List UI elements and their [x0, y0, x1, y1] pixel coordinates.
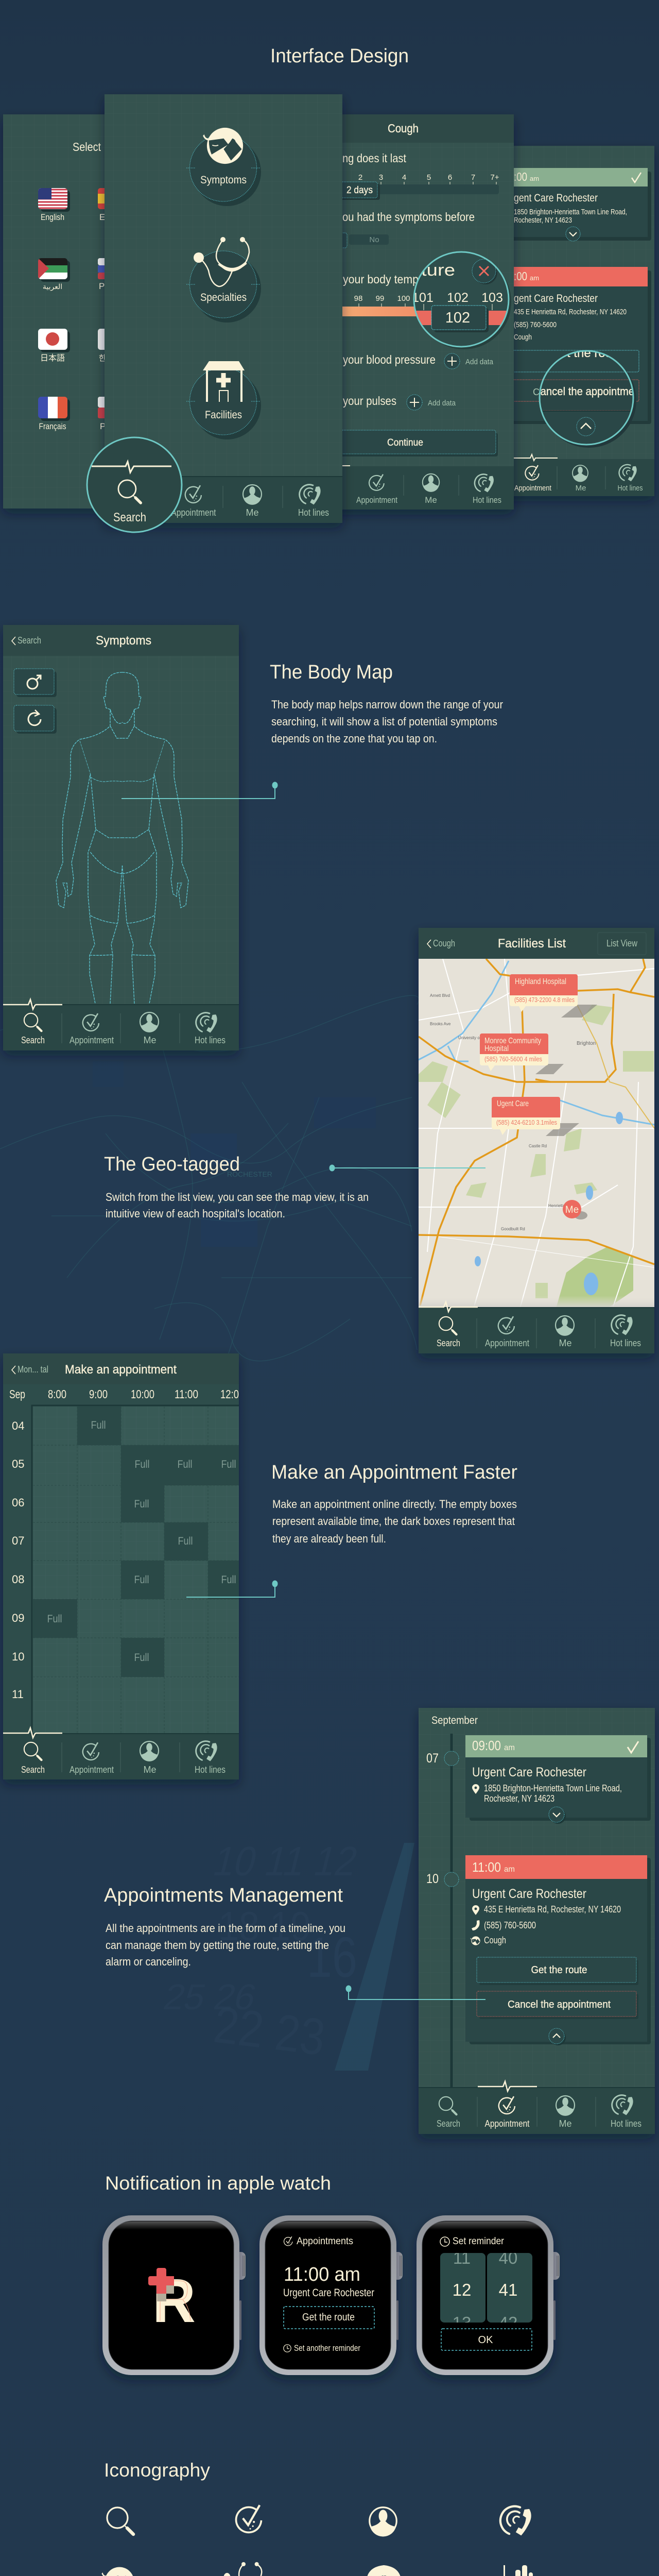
time picker: 41 [499, 2280, 517, 2299]
card: 11:00 appointment: Cancel the appointment [508, 1999, 611, 2010]
nav bar: appointment grid: Hot lines [195, 1765, 226, 1775]
nav bar: body map: Hot lines [195, 1035, 226, 1045]
background: faint calendar numerals: 25 26 [160, 1977, 260, 2018]
card: 11:00 appointment: 435 E Henrietta Rd, Rochester, NY 14620 [484, 1904, 621, 1914]
zoom circle: search tab [87, 437, 182, 532]
map pin: me [563, 1200, 587, 1219]
date column: 07 [12, 1534, 24, 1547]
card: 11:00 appointment: Get the route [531, 1964, 587, 1976]
text: body map description: The body map helps narrow down the range of your [271, 698, 503, 711]
schedule grid: Full [134, 1574, 149, 1586]
panel: facilities map screen [419, 928, 654, 1353]
question: duration: 2 [358, 173, 362, 182]
nav bar: search home screen: Hot lines [298, 507, 329, 518]
apple watch: appointment notification: 11:00 am [284, 2264, 360, 2285]
map pin: Monroe Community Hospital: Hospital [484, 1044, 509, 1053]
nav bar: timeline: Appointment [485, 2119, 529, 2129]
panel: appointments screen (back) [514, 146, 658, 505]
header: make an appointment: Make an appointment [65, 1363, 177, 1377]
text: geo-tagged description: Switch from the list view, you can see the map view, it is an [106, 1191, 369, 1204]
background: faint Rochester street map [0, 995, 419, 1361]
text: appointments management description: alarm or canceling. [106, 1955, 191, 1968]
map: Brighton [577, 1041, 596, 1046]
text: appointment description: they are already been full. [272, 1532, 386, 1545]
button: gender [14, 669, 57, 697]
background: faint calendar numerals: 10 11 12 [209, 1838, 362, 1885]
question: duration [330, 151, 499, 200]
card: 11:00 appointment: Urgent Care Rochester [472, 1887, 586, 1901]
map: Arnett Blvd [430, 993, 450, 998]
logo: R with red cross: R [152, 2265, 196, 2335]
nav bar: body map [3, 999, 239, 1050]
date column: 09 [12, 1612, 24, 1624]
card: 11:00 appointment: 11:00 [472, 1859, 501, 1875]
heading: make an appointment faster: Make an Appointment Faster [271, 1462, 517, 1483]
time row: 10:00 [131, 1387, 154, 1401]
question: pulses: your pulses [343, 394, 396, 408]
schedule grid: Full [221, 1459, 236, 1470]
date column: 06 [12, 1496, 24, 1509]
card: 11:00 appointment: (585) 760-5600 [484, 1920, 536, 1930]
time row: 8:00 [48, 1387, 66, 1401]
menu item: facilities [186, 361, 261, 439]
label: Japanese: 日本語 [40, 353, 65, 363]
icon: search [107, 2507, 133, 2534]
apple watch: set reminder: OK [478, 2334, 493, 2346]
apple watch: appointment notification [259, 2215, 403, 2375]
nav bar: appointments back screen: Hot lines [618, 484, 643, 493]
text: appointment description [272, 1498, 517, 1545]
question: blood pressure: Add data [465, 358, 494, 366]
text: appointments management description [106, 1922, 345, 1968]
question: body temperature: 98 [354, 294, 362, 303]
timeline axis [426, 1734, 459, 2088]
panel: appointments timeline screen [419, 1708, 655, 2134]
label: September: September [431, 1715, 478, 1726]
zoom circle: cancel the appointment [539, 350, 636, 448]
background: faint calendar numerals [160, 1838, 414, 2071]
date column: 05 [12, 1458, 24, 1470]
card: 9am appointment: 1850 Brighton-Henrietta Town Line Road, [514, 208, 627, 216]
question: duration: 4 [402, 173, 406, 182]
heading: iconography: Iconography [104, 2460, 210, 2481]
apple watch: appointment notification: Appointments [297, 2236, 353, 2247]
nav bar: facilities map: Hot lines [610, 1338, 641, 1348]
panel: body map screen [3, 625, 239, 1050]
card: 11am appointment [484, 267, 651, 424]
header: make an appointment [3, 1353, 239, 1384]
card: 11am appointment: am [530, 274, 539, 282]
flags: second column slices: 한 [99, 354, 106, 363]
header: cough [330, 114, 514, 143]
card: 09:00 appointment [465, 1735, 651, 1824]
map pin: Urgent Care: (585) 424-6210 3.1miles [496, 1118, 557, 1126]
map pin: Urgent Care [492, 1097, 579, 1136]
card: 11am appointment: gent Care Rochester [514, 293, 598, 304]
nav bar: timeline: Me [559, 2119, 572, 2129]
card: 09:00 appointment: am [504, 1743, 515, 1752]
timeline axis: 07 [426, 1751, 439, 1766]
flag: France [38, 397, 70, 421]
question: blood pressure: your blood pressure [343, 353, 436, 366]
icon: bar chart [505, 2565, 536, 2576]
flags: second column slices: E [99, 212, 105, 222]
schedule grid: Full [91, 1419, 106, 1431]
question: duration: 5 [427, 173, 431, 182]
card: 9am appointment: :00 [514, 170, 527, 183]
menu item: facilities: Facilities [205, 409, 242, 421]
background: faint calendar numerals: 16 [307, 1926, 357, 1989]
card: 11:00 appointment: am [504, 1865, 515, 1874]
schedule grid: Full [135, 1459, 149, 1470]
nav bar: body map: Me [143, 1035, 157, 1045]
card: 9am appointment: am [530, 175, 539, 182]
panel: language selection screen [0, 114, 105, 517]
map pin: Monroe Community Hospital: Monroe Community [484, 1037, 541, 1045]
timeline axis: 10 [426, 1872, 439, 1886]
icon: stethoscope [223, 2562, 262, 2576]
question: blood pressure [343, 353, 494, 369]
card: 09:00 appointment: Urgent Care Rochester [472, 1765, 586, 1780]
menu item: symptoms [186, 128, 261, 206]
schedule grid: Full [221, 1574, 236, 1586]
zoom circle: temperature picker: ture [421, 261, 455, 279]
title: Interface Design [270, 45, 409, 67]
zoom circle: temperature picker: 103 [481, 291, 503, 305]
nav bar: cough screen: Me [425, 495, 437, 505]
text: appointments management description: All the appointments are in the form of a timeline, you [106, 1922, 345, 1935]
map pin: Monroe Community Hospital: (585) 760-5600 4 miles [484, 1055, 542, 1063]
header: symptoms [3, 625, 239, 656]
text: appointment description: represent available time, the dark boxes represent that [272, 1515, 515, 1528]
text: body map description [271, 698, 503, 745]
date column: 10 [12, 1650, 24, 1663]
question: body temperature: 100 [397, 294, 410, 303]
question: previous symptoms: ou had the symptoms before [342, 210, 475, 224]
map: University of Rochester [458, 1036, 501, 1040]
question: duration: 7 [471, 173, 475, 182]
text: appointment description: Make an appointment online directly. The empty boxes [272, 1498, 517, 1511]
label: French: Français [39, 421, 66, 431]
schedule grid: Full [134, 1652, 149, 1664]
menu item: specialties: Specialties [200, 292, 247, 303]
apple watch: logo screen [102, 2215, 246, 2375]
flags: second column slices: P [99, 281, 105, 291]
nav bar: timeline [419, 2081, 655, 2134]
icon: appointment check [236, 2505, 261, 2532]
card: 09:00 appointment: Rochester, NY 14623 [484, 1793, 554, 1804]
map pin: me: Me [565, 1205, 579, 1215]
date column [3, 1405, 32, 1734]
menu item: symptoms: Symptoms [200, 174, 247, 186]
question: previous symptoms [335, 210, 475, 248]
question: previous symptoms: No [369, 235, 379, 244]
nav bar: search home screen [105, 477, 342, 523]
panel: cough questionnaire screen [330, 114, 515, 510]
nav bar: timeline: Hot lines [611, 2119, 641, 2129]
body outline [56, 672, 188, 1004]
question: body temperature: 99 [376, 294, 384, 303]
nav bar: appointment grid: Appointment [70, 1765, 114, 1775]
apple watch: appointment notification: Urgent Care Rochester [283, 2287, 374, 2299]
nav bar: cough screen: Hot lines [473, 495, 501, 505]
time row: 11:00 [175, 1387, 198, 1401]
button: rotate [14, 705, 57, 734]
nav bar: facilities map [419, 1302, 654, 1353]
header: cough: Cough [388, 122, 419, 135]
time row: Sep [9, 1387, 25, 1401]
question: body temperature: your body temp [343, 273, 419, 286]
time picker: 13 [453, 2313, 471, 2332]
zoom circle: temperature picker: 101 [412, 291, 433, 305]
nav bar: body map: Search [21, 1035, 45, 1045]
background: faint calendar numerals: 18 19 [218, 1903, 311, 1949]
nav bar: appointments back screen: Appointment [514, 484, 552, 493]
heading: select: Select [73, 140, 101, 154]
schedule grid: Full [134, 1498, 149, 1510]
nav bar: cough screen: Appointment [356, 495, 397, 505]
nav bar: timeline: Search [437, 2119, 460, 2129]
nav bar: appointments back screen [484, 454, 654, 496]
map pin: Highland Hospital [510, 974, 597, 1018]
time picker: 40 [499, 2248, 517, 2267]
map [419, 959, 654, 1308]
date column: 04 [12, 1419, 24, 1432]
text: body map description: searching, it will show a list of potential symptoms [271, 715, 497, 728]
header: facilities list: Facilities List [498, 937, 566, 951]
zoom circle: cancel the appointment: Get the route [550, 346, 622, 360]
icon: hot line [500, 2506, 531, 2535]
flag: USA [38, 188, 70, 212]
map label: Rochester: ROCHESTER [227, 1170, 272, 1178]
card: 11am appointment: C [533, 387, 540, 397]
question: pulses [343, 394, 456, 410]
schedule grid [32, 1405, 239, 1734]
card: 9am appointment [484, 168, 651, 241]
zoom circle: cancel the appointment: Cancel the appointment [533, 385, 643, 398]
nav bar: facilities map: Search [437, 1338, 460, 1348]
flag: Palestine [38, 258, 70, 282]
card: 11:00 appointment: Cough [484, 1935, 506, 1945]
icon: umbrella [367, 2565, 401, 2576]
connector: make an appointment [186, 1581, 278, 1597]
header: make an appointment: Mon... tal [18, 1364, 48, 1375]
text: geo-tagged description: intuitive view of each hospital's location. [106, 1207, 285, 1220]
header: facilities list: Cough [433, 938, 455, 948]
card: 11:00 appointment [465, 1855, 651, 2045]
label: Arabic: العربية [43, 282, 62, 291]
map: Goodbuilt Rd [501, 1227, 525, 1231]
map pin: Highland Hospital: (585) 473-2200 4.8 miles [514, 996, 575, 1004]
zoom circle: temperature picker [412, 252, 515, 349]
apple watch: appointment notification: Get the route [302, 2312, 355, 2323]
text: appointments management description: can manage them by getting the route, setting the [106, 1939, 329, 1952]
text: geo-tagged description [106, 1191, 369, 1220]
panel: make an appointment grid screen [3, 1353, 239, 1780]
time row: 12:0 [220, 1387, 239, 1401]
header: symptoms: Search [18, 635, 41, 646]
button: continue [330, 430, 498, 456]
card: 11am appointment: :00 [514, 269, 527, 283]
map: Henrietta [548, 1204, 565, 1208]
card: 11am appointment: (585) 760-5600 [514, 320, 557, 329]
date column: 11 [12, 1688, 24, 1701]
nav bar: cough screen [330, 466, 514, 510]
icon set: iconography grid [88, 2505, 536, 2576]
zoom circle: search tab: Search [113, 511, 146, 524]
background: faint calendar numerals: 22 23 [211, 1996, 328, 2066]
map: Castle Rd [529, 1144, 547, 1148]
zoom circle: temperature picker: 102 [445, 310, 470, 326]
nav bar: appointment grid: Me [143, 1765, 157, 1775]
map pin: Monroe Community Hospital [480, 1033, 564, 1074]
heading: notification in apple watch: Notification in apple watch [105, 2173, 331, 2194]
label: English: English [41, 212, 64, 222]
panel: search home screen [105, 94, 342, 523]
text: body map description: depends on the zone that you tap on. [271, 732, 437, 745]
button: continue: Continue [387, 437, 423, 448]
nav bar: appointment grid: Search [21, 1765, 45, 1775]
nav bar: facilities map: Me [559, 1338, 572, 1348]
menu item: specialties [186, 237, 261, 323]
header: symptoms: Symptoms [96, 634, 151, 648]
apple watch: set reminder: Set reminder [453, 2236, 505, 2247]
nav bar: body map: Appointment [70, 1035, 114, 1045]
question: duration: ng does it last [342, 151, 407, 165]
question: body temperature [342, 273, 507, 316]
map pin: Urgent Care: Ugent Care [497, 1099, 529, 1108]
nav bar: search home screen: Me [246, 507, 259, 518]
map: Brooks Ave [430, 1022, 451, 1026]
time picker [440, 2253, 532, 2323]
icon: person [370, 2507, 396, 2536]
question: duration: 6 [448, 173, 452, 182]
question: duration: 2 days [346, 185, 373, 196]
card: 09:00 appointment: 1850 Brighton-Henrietta Town Line Road, [484, 1783, 622, 1793]
heading: appointments management: Appointments Management [104, 1885, 343, 1906]
nav bar: facilities map: Appointment [485, 1338, 529, 1348]
card: 9am appointment: gent Care Rochester [514, 192, 598, 204]
time picker: 12 [453, 2280, 471, 2299]
nav bar: appointments back screen: Me [576, 484, 586, 493]
flags: second column slices [98, 188, 113, 431]
card: 9am appointment: Rochester, NY 14623 [514, 216, 572, 225]
header: facilities list: List View [606, 938, 638, 948]
schedule grid: Full [178, 1535, 193, 1547]
header: facilities list [419, 928, 654, 959]
question: duration: 3 [379, 173, 383, 182]
icon: masked patient [101, 2567, 134, 2576]
question: pulses: Add data [428, 399, 456, 408]
time row [3, 1384, 239, 1405]
heading: the geo-tagged: The Geo-tagged [104, 1154, 240, 1175]
card: 11am appointment: 435 E Henrietta Rd, Rochester, NY 14620 [514, 308, 627, 316]
nav bar: appointment grid [3, 1728, 239, 1780]
time row: 9:00 [89, 1387, 108, 1401]
apple watch: set reminder [417, 2215, 560, 2375]
flag: Japan [38, 329, 70, 352]
date column: 08 [12, 1573, 24, 1586]
card: 09:00 appointment: 09:00 [472, 1738, 501, 1753]
connector: appointments management [346, 1986, 485, 1999]
connector: body map [122, 782, 278, 799]
heading: the body map: The Body Map [270, 662, 393, 683]
time picker: 11 [453, 2248, 471, 2267]
time picker: 42 [499, 2313, 517, 2332]
schedule grid: Full [177, 1459, 193, 1470]
flags: second column slices: P [100, 421, 106, 431]
question: duration: 7+ [490, 173, 499, 182]
schedule grid: Full [47, 1613, 62, 1625]
map pin: Highland Hospital: Highland Hospital [515, 977, 566, 986]
zoom circle: temperature picker: 102 [447, 291, 469, 305]
nav bar: search home screen: Appointment [171, 507, 216, 518]
connector: geo-tagged [330, 1164, 485, 1172]
card: 11am appointment: Cough [514, 333, 532, 342]
apple watch: appointment notification: Set another reminder [294, 2343, 360, 2353]
